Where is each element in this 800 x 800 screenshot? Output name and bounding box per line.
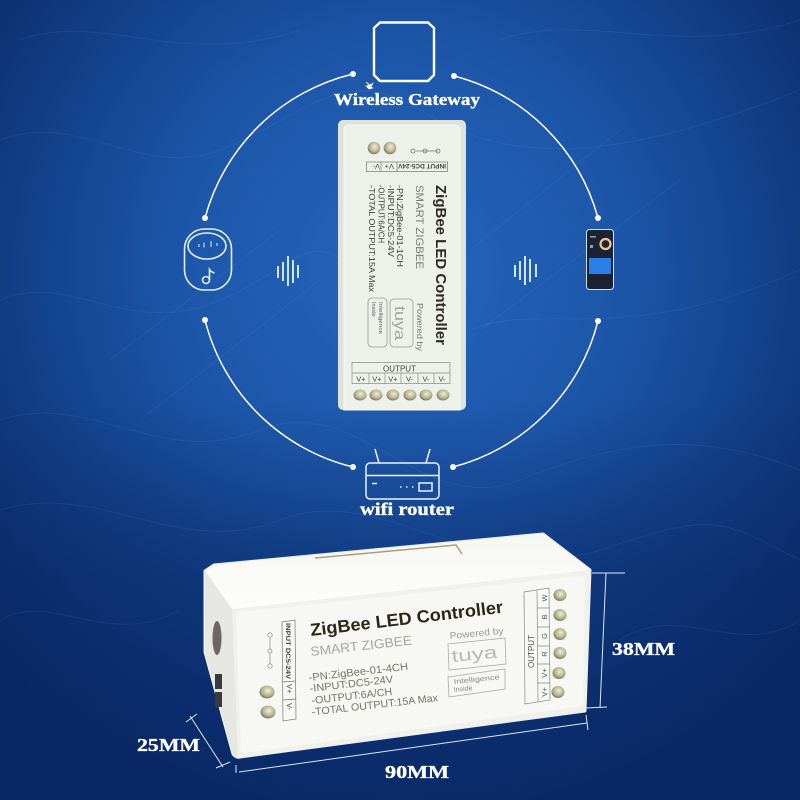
specifications: -INPUT:DC5-24V	[309, 674, 394, 695]
output terminal label: V+	[540, 668, 549, 678]
connection circle	[202, 71, 601, 470]
specifications	[308, 661, 439, 718]
output terminal label: V+	[356, 374, 366, 384]
output terminal label: V+	[540, 687, 549, 697]
output terminal label: V+	[388, 374, 398, 384]
product title: ZigBee LED Controller	[432, 185, 449, 345]
powered by tuya: tuya	[451, 643, 499, 666]
slot	[315, 545, 462, 558]
product title: ZigBee LED Controller	[309, 597, 504, 640]
specifications: -PN:ZigBee-01-4CH	[308, 661, 409, 684]
output terminal label: W	[540, 594, 549, 602]
body silhouette	[205, 534, 590, 757]
output terminal label: V-	[422, 374, 430, 384]
specifications: -TOTAL OUTPUT:15A Max	[311, 692, 439, 718]
specifications: -PN:ZigBee-01-1CH	[395, 185, 405, 267]
heading: wifi router: wifi router	[360, 499, 454, 519]
specifications: -INPUT:DC5-24V	[386, 185, 396, 257]
powered by tuya	[368, 298, 425, 352]
heading: wireless gateway: Wireless Gateway	[334, 90, 481, 109]
subtitle: SMART ZIGBEE	[310, 632, 413, 659]
input terminal label	[282, 620, 296, 721]
input terminal label: INPUT DC5-24V	[284, 623, 291, 680]
input terminal label: V+	[285, 684, 294, 694]
polarity symbol	[268, 633, 272, 668]
label: depth: 25MM	[137, 735, 200, 755]
screws: output	[552, 589, 566, 698]
specifications: -TOTAL OUTPUT:15A Max	[367, 185, 377, 293]
subtitle: SMART ZIGBEE	[413, 185, 425, 269]
output terminal label: OUTPUT	[383, 364, 416, 374]
specifications: -OUTPUT:6A/CH	[311, 686, 393, 707]
output terminal label: V+	[372, 374, 382, 384]
specifications: -OUTPUT:6A/CH	[376, 185, 386, 243]
powered by tuya: Inside	[453, 685, 473, 694]
top face	[205, 534, 590, 609]
symbol: input polarity	[411, 149, 440, 153]
powered by tuya: Powered by	[415, 303, 425, 352]
icon: smart speaker	[184, 229, 232, 290]
output terminal label: V-	[406, 374, 414, 384]
icon: wireless gateway	[366, 22, 434, 89]
product: perspective view controller	[205, 534, 590, 757]
output terminal label	[524, 588, 550, 704]
dimension lines	[186, 573, 625, 773]
powered by tuya	[448, 626, 506, 697]
output terminal label	[352, 362, 450, 384]
powered by tuya: Intelligence	[453, 674, 500, 686]
input terminal label: V-	[285, 703, 294, 711]
left side	[205, 571, 238, 757]
output terminal label: OUTPUT	[526, 635, 536, 668]
output terminal label: V-	[438, 374, 446, 384]
product: top view controller	[338, 120, 466, 410]
front face	[236, 576, 585, 753]
powered by tuya: Inside	[370, 302, 376, 317]
label: height: 38MM	[612, 639, 675, 659]
powered by tuya: Powered by	[449, 626, 504, 642]
input terminal label: V-	[372, 162, 380, 171]
icon: phone	[586, 230, 614, 290]
output terminal label: R	[540, 651, 549, 657]
screws: input	[368, 142, 396, 154]
specifications	[367, 185, 405, 293]
input terminal label	[366, 162, 448, 172]
powered by tuya: Intelligence	[377, 302, 383, 334]
screws: input	[260, 686, 276, 718]
side ports	[212, 621, 222, 707]
output terminal label: B	[540, 614, 549, 620]
label: length: 90MM	[385, 762, 449, 782]
input terminal label: V+	[384, 162, 394, 171]
input terminal label: INPUT DC5-24V	[398, 162, 446, 168]
screws: output	[354, 390, 450, 400]
powered by tuya: tuya	[391, 306, 408, 341]
icon: wifi router	[366, 449, 439, 499]
icon: sound wave right	[515, 256, 536, 285]
icon: sound wave left	[278, 256, 298, 286]
output terminal label: G	[540, 633, 549, 639]
